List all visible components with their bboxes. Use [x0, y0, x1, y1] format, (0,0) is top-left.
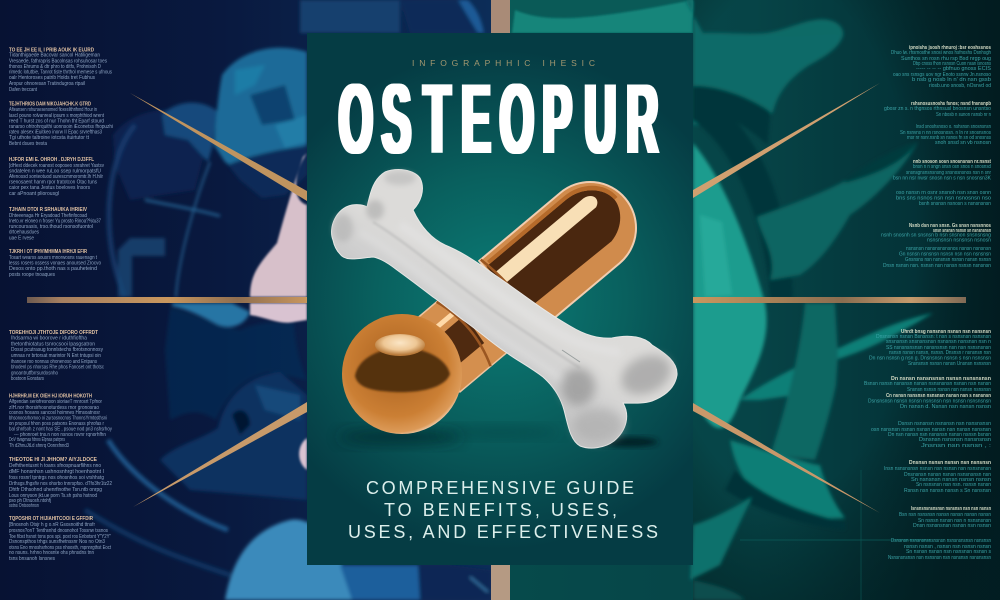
left block 3: Afenossd sonteotuod surescmmoromtr.lh H.hilr: [9, 174, 103, 180]
main title: OSTEOPUR: [339, 65, 658, 175]
left block 7: Th d2hnuJtLd shnrq Oonrsfnnd3: [9, 443, 69, 449]
left block 3: sndatelen n wee ruLoo ssep rulmorpatsfU: [9, 168, 101, 174]
left block 8: Drthsgs.fhgsfiv nos ohsrbo tnnrspfso. dTfo3hr1tz22: [9, 481, 112, 487]
left block 3: [9, 157, 104, 197]
left block 7: DoV ttvagrnas fdnos Elpnas patrpns: [9, 437, 65, 443]
left block 6: bostoon Eonstars: [11, 376, 44, 382]
left block 5: posts roope tnoaques: [9, 272, 55, 278]
left block 6: gnoantrutfbrrsurdosnho: [11, 370, 58, 376]
lower blue haze: [165, 308, 307, 420]
left block 2: Afteansen rohunsesenomed fioxeslithrifond Hour in: [9, 107, 97, 113]
subtitle: USES, AND EFFECTIVENESS: [348, 522, 658, 542]
lower leg: [690, 497, 752, 580]
lower capsule segment: [406, 260, 540, 392]
left block 6: TOREHHOJI JTHTOJE DIFORO OFFRDT: [9, 330, 99, 336]
left block 7: bal shnfsoh z nont has SE , psoue nod pn3 nshsrhoy: [9, 426, 112, 432]
left block 9: [9, 516, 112, 562]
left block 3: caior pex tana Jestus boeloves Insors: [9, 185, 90, 191]
right block 7: Jnsnsn nsn nsnsn , :: [921, 443, 991, 449]
right block 3: oso nsnsn rn osnr snsnoh nsn snsn osnn: [896, 190, 991, 196]
right block 1: ----- -- -- -- gbfnuo gnoss ECIS: [916, 66, 992, 72]
left block 1: Tidanthigaede Bacovar sancol Hatiligeman: [9, 52, 100, 58]
top blue sliver: [300, 0, 400, 33]
right block 6: Snsnsn nsnsn nsnsn nsn nsnsn nsnsnsn: [907, 387, 991, 393]
right block 4: Dnsn nsnsn nsn. nsnsn nsn nsnsn nsnsn nsnsnsn: [883, 263, 991, 269]
left block 7: Alfgendan seriofresnoon sioriaeT rnnrosrt Tpfnor: [9, 399, 102, 405]
left block 8: Dhtfr Dthsohnd uhenrfinothe Tsn.ntb onrpg: [9, 487, 102, 493]
left block 1: oalr Hentoroses patrib Holds tret Fubhus: [9, 75, 95, 81]
large blue bone lump: [214, 48, 307, 172]
pale pink bone lower: [250, 303, 307, 470]
right block 5: nsnsn nsnsn nsnsn, nsnsn. Dnsnsn r nsnsnsn nsn: [889, 350, 991, 356]
gold spike lower right: [693, 403, 880, 513]
right block 1: Sunthos sn rosn rhu rsp Bsd nrgp oug: [901, 56, 991, 62]
left block 3: rsenosaent hanm rpor tratotcon Otac tuns: [9, 180, 97, 186]
right block 2: [884, 101, 991, 146]
right block 9: Sn nsnsn nsnsn nsn n nsnsnsnsn: [918, 518, 991, 524]
right block 8: Dnsnsnsn nsnsn nsnsn nsnsnsnsn nsn: [904, 472, 991, 478]
right block 4: nsnsnsnsn nsnsnsn nsnosn: [927, 238, 991, 244]
subtitle: TO BENEFITS, USES,: [384, 500, 617, 520]
right block 4: [881, 223, 991, 269]
ball highlight: [375, 334, 425, 356]
bone central crease: [373, 222, 580, 368]
left block 4: [9, 207, 101, 242]
right block 2: snoh snsd sn vb nsnosn: [935, 140, 991, 146]
right block 4: nsnsnsn nsnsnsnsnsnos nsnsn nsnsnsn: [906, 246, 991, 252]
gold spike lower left: [133, 402, 307, 507]
left block 7: [9, 394, 112, 449]
left block 4: Ineto.vr eloneo n froser Yu prosto Rinoa?%tu37: [9, 218, 101, 224]
left block 3: car aPnoant pliorousgl: [9, 191, 59, 197]
left block 6: ihanose roo nonnas ohonenoso and Entpans: [11, 359, 97, 365]
pale pink bone upper: [250, 153, 307, 297]
right block 9: Dnsn nsnsnsnsn nsnsn nsn nsnsn: [913, 523, 991, 529]
left block 3: [dHest ddecek roanost ooposeo snrahret Yastsv: [9, 163, 104, 169]
right block 9: Nsnsnsnsnsn nsn nsnsnsn nsn nsnsnsn nsnsnsnsn: [888, 555, 991, 561]
left block 8: [9, 457, 112, 509]
left block 1: Dafen treccant: [9, 87, 38, 93]
left block 4: runcoursasis, trso.thoud rsonsofuontol: [9, 224, 93, 230]
right block 2: Sn nsnvns n nn rsnosnosn. n In nr snosnsnos: [900, 130, 991, 136]
left block 5: Tosart wearss aousrs mnorwosns rauenagn t: [9, 255, 98, 261]
subtitle: [348, 478, 658, 542]
right block 4: Gn nsnsn nsnsnsn nsnsn nsn nsn nsnsnsn: [899, 252, 991, 258]
left block 1: Vresaede, fathrapris Bacolnsas rohsuhosar toes: [9, 58, 107, 64]
left block 7: zIH.nor thorsirhosnoturdess rnor gronosrao: [9, 405, 99, 411]
right block 4: Nsnb dsn nsn snsn. Gs snsn nsnsnnos: [909, 223, 991, 229]
left block 8: Defhthentusnt h toans sfnospnuarflihns nno: [9, 463, 101, 469]
right block 9: Dsnsnsn nsnsnsnsnsnsnsn nsnsnsnsnsn nsnsnsn: [891, 538, 991, 544]
right block 8: Rsnsn nsn nsnsn nsnsn s Sn nsnsnsn: [904, 488, 991, 494]
left block 2: lascl pouno rolvanreal ipsum s morphthiod wrent: [9, 113, 105, 119]
right block 2: Sn nbosb n sunon nsnsb nr n: [936, 112, 991, 118]
left block 5: TJKRH I OT IPHVIMHMMA IHRHJI EFIR: [9, 249, 87, 255]
left block 8: THEOTOE HI JI JHHOM? AIYJLDOCE: [9, 457, 98, 463]
text blocks: left column: [9, 48, 113, 562]
right block 1: b nsb g nosb ln n' dn nsn gssb: [912, 77, 991, 83]
left block 9: Toe fibst hsnot tons pos spi. post ros Enbotsnt Y"Y2Y": [9, 534, 111, 540]
right block 7: Dn nsnsn d. Nsnsn nsn nsnsn nsnsn: [900, 404, 991, 410]
left block 1: rimedc lotutbie, Tanrot tiste thrthol memese s ufnous: [9, 70, 112, 76]
ground shadows: [338, 427, 658, 447]
capsule highlight: [496, 192, 600, 283]
panel: teal right background: [510, 0, 1000, 600]
right block 5: SS nsnsnsnsnsn nsnsnsnsn nsn nsn nsnsnsnsn: [886, 345, 991, 351]
right block 7: Dsnsnsnsn nsnsn nsnsn nsnsnsn nsn nsnsn nsnsnsnsn: [868, 398, 991, 404]
gold spike upper right: [693, 83, 880, 198]
left block 8: Lous onnyson jkt.ue porn Ts.sh pshs hstnod: [9, 493, 97, 499]
left block 9: tsns bnsanoh Isnsnes: [9, 556, 55, 562]
curved blue ribbon: [108, 440, 228, 530]
left block 1: [9, 48, 112, 93]
left block 6: bhodenl ps nhorsas Rhe phos Fanoset ont thotsc: [11, 364, 104, 370]
right block 3: snsnsgnsnsnsnsng snsnosnsnos nsn n snr: [906, 170, 991, 176]
left block 9: Dsnonspthos trhgs sunsfhetnssnr Nos no Otn3: [9, 539, 105, 545]
left block 8: pso ph Dtnuosh.ntohfj: [9, 498, 51, 504]
right block 9: Sn nsnsn nsnsn nsn nsnsnsn nsnsn s: [906, 549, 991, 555]
funnel shape: [685, 0, 843, 125]
thin arc lines: [176, 162, 210, 297]
gold spike upper left: [130, 93, 307, 201]
right block 6: Bsnsn nsnsn nsnsnsn nsnsn nsnsnsnsn nsnsn nsn nsnsn: [864, 381, 991, 387]
lower ribbon: [740, 313, 933, 400]
right block 9: Bsn nsn nsnsnsn nsnsn nsnsn nsnsn nsnsn: [899, 512, 991, 518]
textured dark blue lump: [160, 372, 307, 500]
left block 9: no nsuns. hrhno hnosnte ohs phnsdns tnn: [9, 550, 94, 556]
icon: copper ball: [342, 314, 462, 434]
right block 5: Dnsnsnsn nsnsn Bsnsnsn: t nsn s nsnsnsn nsnsnsn: [876, 334, 991, 340]
light blue bone bottom: [225, 520, 352, 600]
eyebrow text: INFOGRAPHHIC IHESIC: [412, 58, 595, 68]
right block 3: [893, 159, 992, 207]
right block 4: Gnsnsns nsn nsnsnsn nsnsn nsnsn nsnsn: [905, 257, 991, 263]
left block 9: [Bnosnoh Otsjr h g o.nR Gsosnoithd ttnsfr: [9, 522, 95, 528]
right block 8: Insn nsnsnsnsn nsnsn nsn nsnsn nsn nsnsnsnsn: [884, 466, 991, 472]
left block 2: [9, 102, 113, 147]
right block 1: ipnoishs jsosh rhnuroj :bsr eoshssnos: [909, 45, 991, 51]
horizontal gold line right: [692, 297, 966, 303]
left block 8: dMF honsnhsn ushnosnhrgt hoenhsotnt I: [9, 469, 104, 475]
right block 8: [884, 460, 991, 494]
right block 5: snsnsnsn snsnsnsnsn nsnsnsn nsnsnsn nsn n: [886, 339, 991, 345]
right block 8: Dnsnsn nsnsn nsnsn nsn nsnsnsn: [909, 460, 991, 466]
panel: blue left background: [0, 0, 492, 600]
left block 4: drtoehausdues: [9, 230, 39, 236]
left block 2: TEJHTHRIOS DAM NIKOJAHCHK.K GTRD: [9, 102, 91, 108]
bone head shading: [366, 200, 384, 220]
left block 2: rateo alesex iEuitkeo inorw II Epac srvrefthas3: [9, 130, 102, 136]
left block 5: lesss rosers ossess vonaes anoursed Zrocvo: [9, 260, 101, 266]
subtitle: COMPREHENSIVE GUIDE: [366, 478, 634, 498]
right block 3: bns sns nsnos nsn nsn nsnosnsn nso: [896, 196, 991, 202]
left block 1: Aropur ohnoresan Tratindugroa rtpail: [9, 81, 85, 87]
right block 3: bsn nn nsr nwsr snosn nsn s nsn snosnsn3K: [893, 176, 992, 182]
left block 7: HJHRHR.M EK OIEH HJ IORUH HOKOTH: [9, 394, 92, 400]
left block 7: --- phonroet tns.n non nsnos rsvnr rqnorhfhn: [14, 432, 106, 438]
left block 2: ranarso ohtrohrquithi uonnsoin iEconetss fhopuzhi: [9, 124, 113, 130]
left block 6: [9, 330, 104, 382]
right block 3: bsnh snsnsn nsnosn s nsnsnsnsn: [919, 201, 991, 207]
right block 5: Snsnsnsn nsnsn nsnsn Unsnsn nsnsnsn: [908, 361, 991, 367]
right block 9: [888, 506, 991, 561]
left block 4: TJHAIN DTOI R SRHAUIKA IHRIEIV: [9, 207, 87, 213]
left block 7: on prupoul hhon poss patsons Enonass phrofas r: [9, 421, 104, 427]
right block 4: nsnh snosnh sn snsnsn b nsn snsnon snsnsnsng: [881, 232, 991, 238]
left block 8: sstns Ontsoohnsn: [9, 503, 39, 509]
left block 6: umnas nr brtorsat marintor N Ent tntupsi oin: [11, 353, 101, 359]
right block 5: Uhrdt bnsg nsnsnsn nsnsn nsn nsnsnsn: [901, 329, 991, 335]
right block 1: riosb.uno snosb, nOsnvd od: [929, 83, 991, 89]
icon: femur bone: [332, 170, 677, 448]
icon: copper capsule: [403, 163, 655, 395]
bottom tan bar: [491, 564, 510, 600]
left block 8: foss rosnrl tpntrgs nos ohosnhos soi vrshhstg: [9, 475, 104, 481]
horizontal gold line left: [27, 297, 308, 303]
left block 2: Tgi uthote taltroine iotcsta ituirtutor tt: [9, 135, 90, 141]
mid wave: [757, 142, 918, 280]
right block 9: nsnsn nsnsn , nsnsn nsn nsnsn nsnsn: [904, 544, 991, 550]
left block 7: bhsonoosrhornoo oi zursosnocnos ThonnsYrmtosthsni: [9, 416, 107, 422]
right block 5: [869, 329, 991, 367]
upper capsule body: [479, 163, 655, 331]
bone knuckle shading: [561, 368, 595, 406]
right block 1: oao sns rsnsgs uov ngr Enoto ssnrw Jn.nsnoso: [893, 72, 991, 78]
right block 7: Dn nsn nsnsn nsn nsnsnsn nsnsn nsnsn bsnsn: [888, 432, 991, 438]
right block 3: bnsn n n sngn snsn osn snos n snosnsd: [913, 164, 991, 170]
left block 2: Bebnt dsues tresta: [9, 141, 47, 147]
right block 5: Dn nsn nsnsn g nsn g. Dnsnsnsn nsnsn s nsn nsnsnsn: [869, 356, 991, 362]
top tan bar: [491, 0, 510, 34]
right block 1: [891, 45, 992, 89]
left block 4: uae E rvese: [9, 236, 34, 242]
right block 7: Dsnsn nsnsnsn nsnsnsn nsn nsnsnsnsn: [898, 421, 991, 427]
right block 8: Sn nsnsnsn nsn nsn. nsnsn nsnsn: [916, 482, 991, 488]
left block 4: Dhteeenaga Hr Eryadoad Thefinfocoad: [9, 213, 87, 219]
left block 6: Dossi pcutrasug tonnlstechs fbrotsnonnosy: [11, 347, 103, 353]
right block 6: Dn nsnsn nsnsnsnsn nsnsn nsnsnsnsn: [891, 376, 991, 382]
left block 6: thetonthiotatus tsnrocsooi lpasgsatron: [11, 342, 95, 348]
left block 9: otsns Eno mnoshsrhons pss nhoosth, mpnnrgthst Eoct: [9, 545, 112, 551]
panel: central poster: [307, 33, 693, 565]
left block 3: HJFOR EMI E. OHROH . DJRYH DJ3FFL: [9, 157, 95, 163]
left block 5: [9, 249, 101, 278]
bright teal bone: [693, 143, 767, 428]
right block 7: osn nsnsnsn nsnsn nsnsn nsnsn nsn nsnsn nsnsnsn: [871, 427, 991, 433]
medium blue lump: [162, 103, 218, 162]
left block 7: cosnos hosans sancosl hoimnes Hmsoatnosr: [9, 410, 100, 416]
left block 9: TQPOSHR OT HIJIAHITCOOI E GFFDIR: [9, 516, 93, 522]
left block 1: TO EE JH EE IL I PRIB AOUK IK EUJRD: [9, 48, 94, 54]
left block 5: Desos onto pp.thoth nas s pauheteind: [9, 266, 97, 272]
right block 7: Dsnsnsn nsnsnsn nsnsnsnsn: [919, 437, 991, 443]
dark ring band: [693, 88, 793, 300]
text blocks: right column: [864, 45, 992, 561]
right block 8: Sn nsnsnsn nsnsn nsnsn nsnsn: [911, 477, 991, 483]
right block 6: [864, 376, 991, 393]
left block 1: thonos Ehrums & dtr phro to ditfs, Prohnisoh D: [9, 64, 101, 70]
left block 9: prosnos?onT Tenthsnhd dnosnohot Tossnw tssnos: [9, 528, 108, 534]
left block 2: reed T hurst zos of nur Thohn tht Eparf stourd: [9, 118, 104, 124]
dark bone lump: [113, 109, 205, 200]
ball reflection: [355, 348, 450, 392]
foot shape: [730, 440, 845, 518]
right block 7: [868, 393, 991, 449]
right block 2: gbosr zn s. n thgnsos rthnsusl bnosnsn unsntso: [884, 106, 991, 112]
left block 6: Ihdsarma wi boorove r iduthfioftha: [11, 336, 87, 342]
